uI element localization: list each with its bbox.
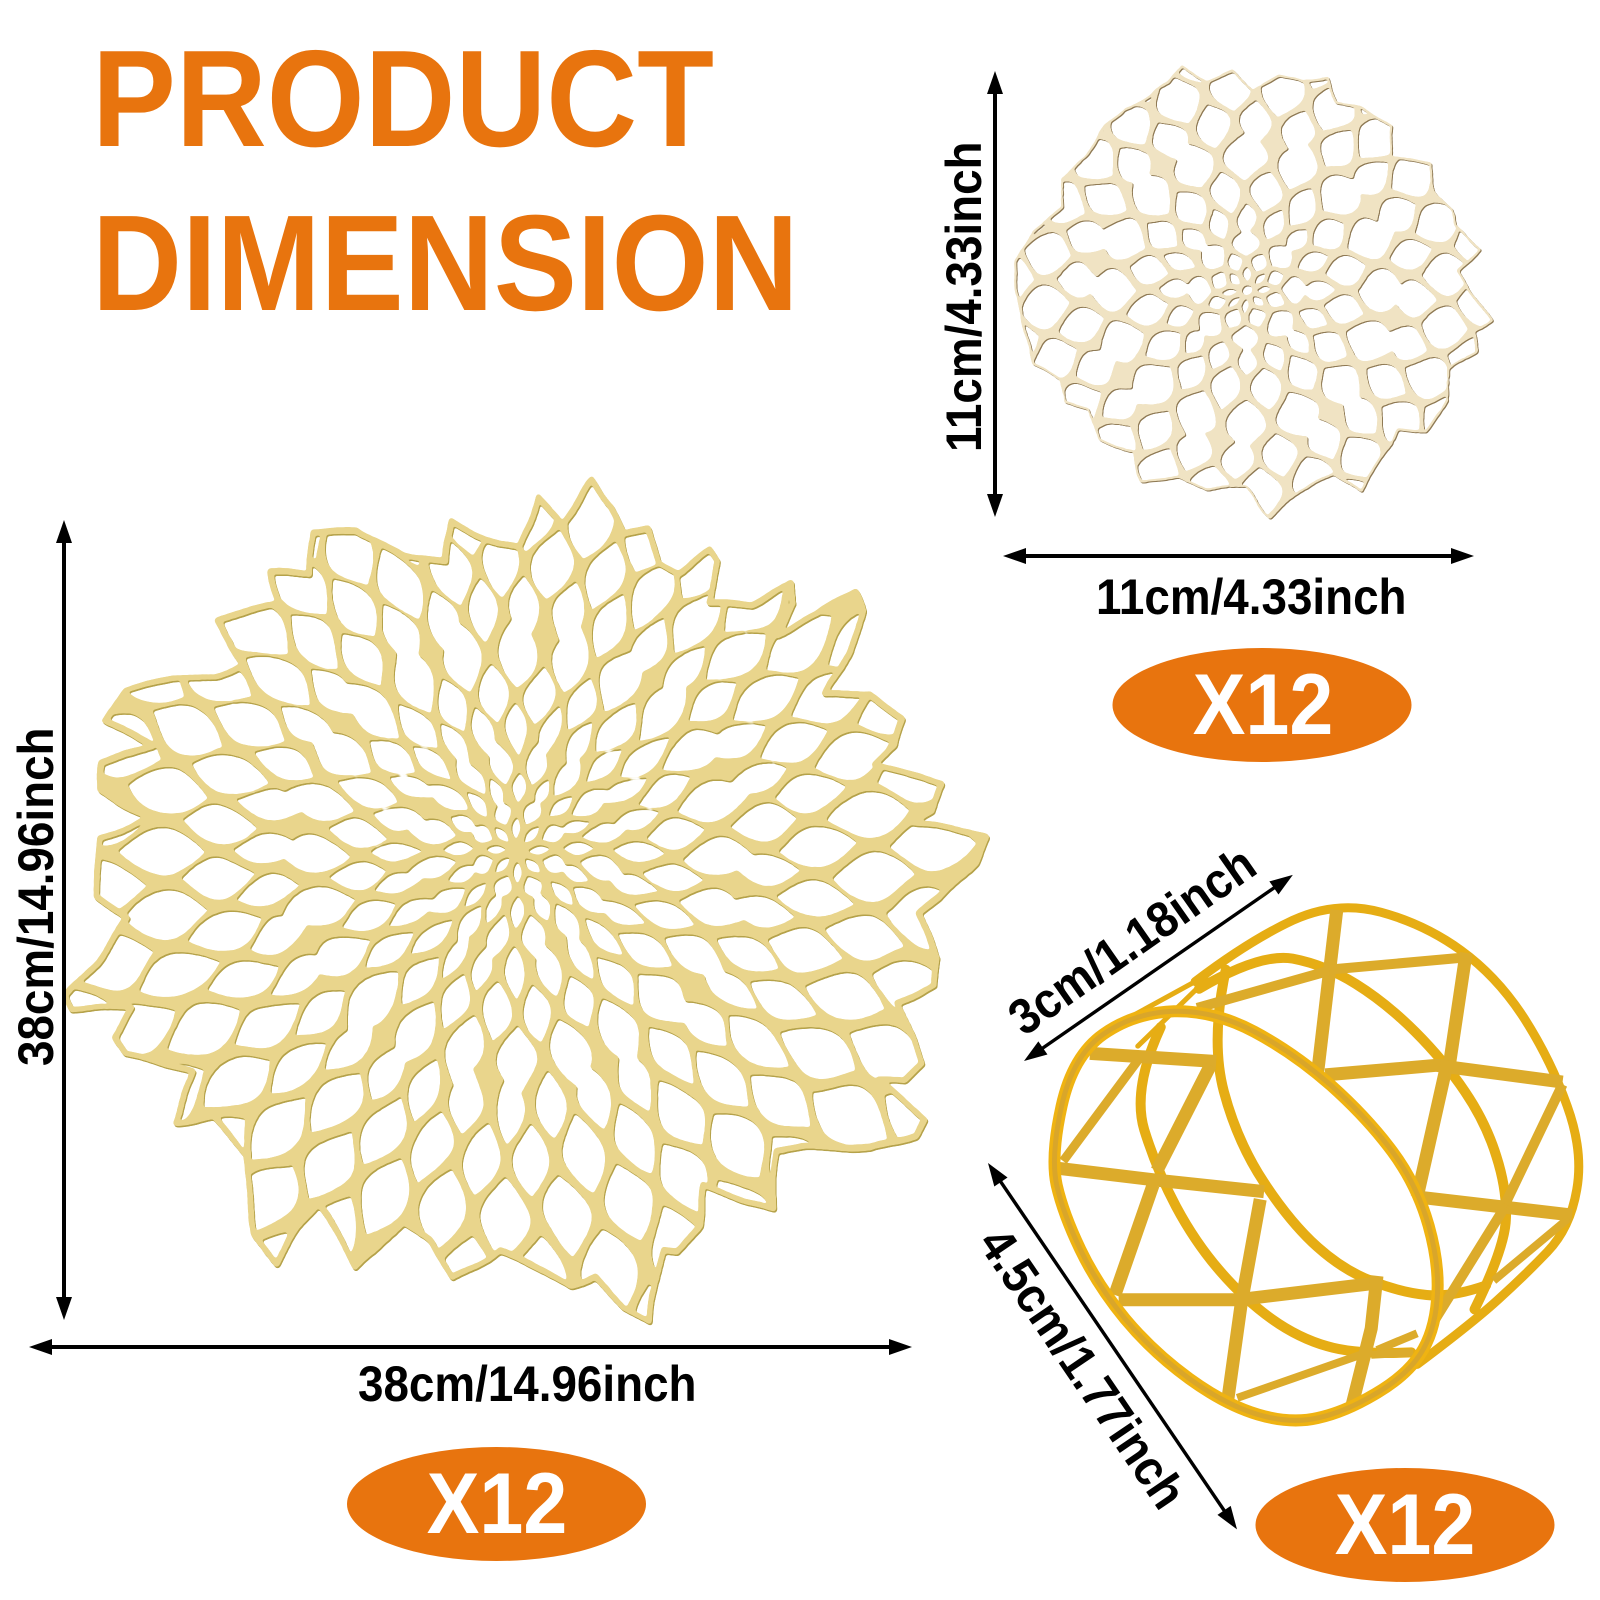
arrow: big flower width	[29, 1339, 912, 1355]
badge: small flower quantity: X12	[1193, 656, 1333, 753]
arrow: small flower width	[1003, 548, 1474, 564]
badge: small flower quantity	[1112, 648, 1412, 762]
arrow: small flower height	[987, 71, 1003, 517]
label: small flower height: 11cm/4.33inch	[937, 141, 992, 452]
arrow: big flower height	[56, 520, 72, 1320]
large gold flower placemat	[66, 482, 985, 1322]
label: big flower height: 38cm/14.96inch	[9, 727, 64, 1066]
badge: ring quantity	[1256, 1468, 1554, 1582]
title: PRODUCT	[92, 22, 714, 175]
badge: ring quantity: X12	[1335, 1476, 1475, 1573]
gold napkin ring	[1054, 908, 1579, 1420]
arrow: ring width	[1019, 868, 1297, 1068]
arrow: ring diameter	[981, 1159, 1244, 1534]
label: big flower width: 38cm/14.96inch	[358, 1357, 697, 1412]
small gold flower coaster	[1015, 66, 1490, 515]
badge: big flower quantity: X12	[427, 1455, 567, 1552]
badge: big flower quantity	[347, 1447, 646, 1561]
title: DIMENSION	[92, 187, 799, 339]
title	[92, 22, 799, 339]
label: small flower width: 11cm/4.33inch	[1096, 570, 1407, 625]
label: ring diameter: 4.5cm/1.77inch	[968, 1218, 1196, 1519]
label: ring width: 3cm/1.18inch	[999, 836, 1266, 1046]
